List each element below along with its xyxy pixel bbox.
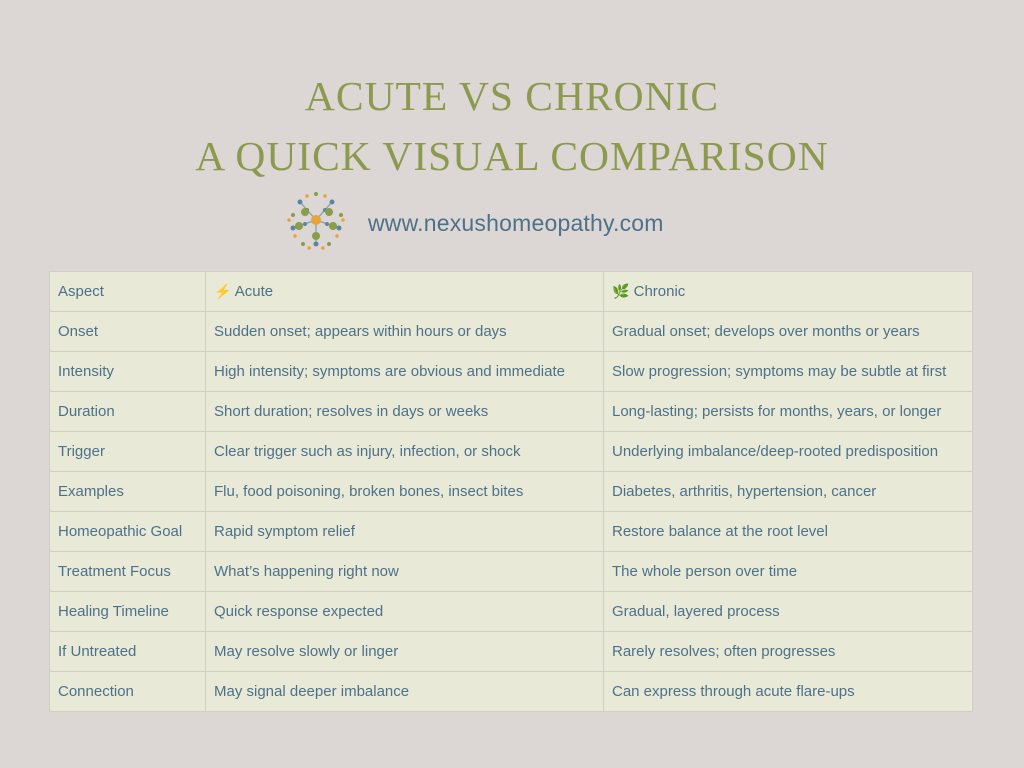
title: A QUICK VISUAL COMPARISON — [195, 133, 829, 179]
comparison table: Long-lasting; persists for months, years, or longer — [612, 402, 941, 420]
icon: logo — [287, 192, 345, 250]
comparison table: Can express through acute flare-ups — [612, 682, 855, 700]
title — [195, 73, 829, 179]
comparison table: Aspect — [58, 282, 104, 300]
comparison table: Treatment Focus — [58, 562, 171, 580]
title: ACUTE VS CHRONIC — [305, 73, 719, 119]
comparison table: High intensity; symptoms are obvious and immediate — [214, 362, 565, 380]
url text: www.nexushomeopathy.com — [368, 210, 664, 236]
comparison table: Clear trigger such as injury, infection, or shock — [214, 442, 521, 460]
comparison table: Quick response expected — [214, 602, 383, 620]
comparison table: 🌿 Chronic — [612, 283, 685, 300]
comparison table: Gradual, layered process — [612, 602, 780, 620]
comparison table: Onset — [58, 322, 98, 340]
comparison table: Short duration; resolves in days or weeks — [214, 402, 488, 420]
comparison table: ⚡ Acute — [214, 283, 273, 300]
comparison table: Intensity — [58, 362, 114, 380]
comparison table: May resolve slowly or linger — [214, 642, 398, 660]
comparison table: May signal deeper imbalance — [214, 682, 409, 700]
comparison table — [49, 271, 973, 712]
comparison table: The whole person over time — [612, 562, 797, 580]
comparison table: Sudden onset; appears within hours or days — [214, 322, 507, 340]
comparison table: Rarely resolves; often progresses — [612, 642, 835, 660]
comparison table: What’s happening right now — [214, 562, 399, 580]
comparison table: Gradual onset; develops over months or years — [612, 322, 920, 340]
comparison table: Flu, food poisoning, broken bones, insect bites — [214, 482, 523, 500]
comparison table: Slow progression; symptoms may be subtle at first — [612, 362, 946, 380]
comparison table: Rapid symptom relief — [214, 522, 355, 540]
comparison table: Healing Timeline — [58, 602, 169, 620]
comparison table: Restore balance at the root level — [612, 522, 828, 540]
comparison table: Trigger — [58, 442, 105, 460]
comparison table: Duration — [58, 402, 115, 420]
comparison table: Examples — [58, 482, 124, 500]
comparison table: Diabetes, arthritis, hypertension, cancer — [612, 482, 876, 500]
comparison table: Homeopathic Goal — [58, 522, 182, 540]
comparison table: Underlying imbalance/deep-rooted predisposition — [612, 442, 938, 460]
comparison table: If Untreated — [58, 642, 136, 660]
comparison table: Connection — [58, 682, 134, 700]
